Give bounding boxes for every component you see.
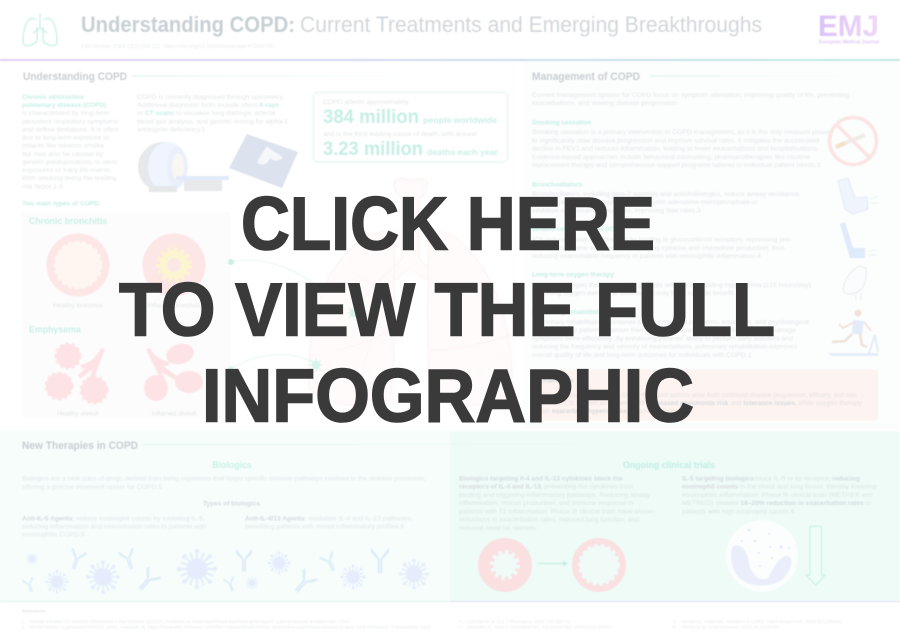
block: bronchodilators: Bronchodilators	[532, 182, 583, 188]
references: References	[22, 608, 46, 614]
text: definition: due to long-term exposure to	[22, 134, 109, 142]
callout: challenges: can exacerbate hypercapnia in some patients.	[539, 408, 680, 415]
references: Miravitlles M, Tonia T. Onorpifleol MC. Clin Chest Med. 2020;41(3):475-84.	[467, 624, 612, 630]
text: definition: persistent respiratory symptoms	[22, 118, 119, 126]
icon: chest x-ray	[229, 134, 298, 188]
header gradient bar	[0, 59, 900, 61]
text: definition: and airflow limitations. It is often	[22, 126, 119, 134]
text: IL-4 and IL-13 biologics: reduced need for steroids.	[459, 525, 538, 532]
icon: eosinophil	[726, 520, 798, 592]
block: long-term oxygen therapy	[532, 272, 813, 297]
text: IL-4 and IL-13 biologics: Biologics targeting Il-4 and IL-13 cytokines block the	[459, 476, 623, 482]
block: inhaled corticosteroids: Inhaled corticosteroids (ICS)	[532, 226, 620, 233]
icon: healthy alveoli	[46, 344, 107, 403]
icon: opened airway	[572, 538, 626, 592]
heading: ongoing clinical trials: Ongoing clinical trials	[623, 460, 715, 470]
block: pulmonary rehabilitation: Pulmonary rehabilitation combines tailored exercise programs, education, and psychological	[532, 319, 809, 326]
block: pulmonary rehabilitation: support to help patients improve their functional capacity, build confidence, and manage	[532, 327, 796, 334]
title: Understanding COPD:	[81, 12, 295, 37]
text: IL-5 biologics: eosinophilic inflammation. Phase III clinical trials (METREX and	[682, 492, 873, 499]
block: long-term oxygen therapy: Long-term oxygen therapy	[532, 272, 614, 278]
text: IL-5 biologics: METREO) showed 18–20% reduction in exacerbation rates in	[682, 500, 871, 507]
text: IL-5 biologics: IL-5 targeting biologics block IL-5 or its receptor, reducing	[682, 476, 860, 482]
references: Kersul AL, Cosío BG. Biologics in COPD. Open Respir Arch. 2024;6(2):100306.	[682, 619, 843, 624]
title	[81, 12, 762, 37]
block: pulmonary rehabilitation: symptoms more effectively. By enhancing patients' ability to perform daily activities and	[532, 336, 793, 342]
text: diagnosis: or CT scans to visualise lung damage, arterial	[137, 110, 275, 117]
text: diagnosis: antitrypsin deficiency.1	[137, 126, 205, 134]
icon: no smoking	[830, 118, 876, 164]
text: biologics definition: Biologics are a new class of drugs derived from living organisms that target specific immune pathways involved in the disease processes,	[22, 476, 426, 482]
block: smoking cessation: replacement therapy and comprehensive support programs tailored to individual patient needs.1	[532, 162, 821, 169]
logo: EMJ: EMJ	[818, 10, 879, 43]
icon: inflamed alveoli	[144, 341, 203, 401]
block: smoking cessation: Smoking cessation is a primary intervention in COPD management, as it is the only measure proven	[532, 129, 833, 136]
icon: lungs	[23, 13, 57, 46]
text: anti-IL-5: Anti-IL-5 Agents: reduce eosinophil counts by inhibiting IL-5,	[22, 516, 205, 522]
icon: inhaler	[838, 178, 879, 214]
subheading: two main types: Two main types of COPD:	[22, 200, 101, 208]
logo: EMJ: European Medical Journal	[819, 40, 880, 46]
block: inhaled corticosteroids: reducing exacerbation frequency in patients with eosinophilic inflammation.4	[532, 253, 761, 260]
references: 3.	[459, 619, 463, 624]
label: Healthy alveoli	[57, 410, 99, 418]
block: inhaled corticosteroids: ICS reduce airway inflammation by binding to glucocorticoid receptors, repressing pro-	[532, 236, 792, 244]
panel: understanding COPD	[22, 71, 508, 418]
callout: key statistics: 384 million	[323, 107, 419, 128]
sub-panel: ongoing clinical trials	[459, 460, 878, 592]
panel: disease types	[22, 212, 230, 418]
illustration: central lungs	[309, 178, 512, 406]
text: biologics definition: offering a precise treatment option for COPD.5	[22, 484, 162, 491]
text: IL-4 and IL-13 biologics: receptors of IL-4 and IL-13, preventing the cytokines from	[459, 484, 633, 490]
panel: new therapies in COPD	[0, 431, 900, 602]
block: bronchodilators: and improve airflow through increased cyclic adenosine monophosphate or	[532, 199, 758, 206]
callout: challenges: effects. ICS is often associated with increased pneumonia risk and tolerance issues, while oxygen therapy	[539, 400, 863, 407]
heading: biologics: Biologics	[212, 460, 252, 470]
text: diagnosis: Additional diagnostic tools include chest X-rays	[137, 102, 279, 109]
block: pulmonary rehabilitation: overall quality of life and long-term outcomes for individuals with COPD.1	[532, 352, 752, 359]
references: 5.	[673, 619, 677, 624]
callout: key statistics	[314, 92, 508, 162]
callout: challenges	[532, 370, 878, 420]
block: pulmonary rehabilitation: Pulmonary rehabilitation	[532, 309, 608, 316]
text: definition: genetic predispositions, in utero	[22, 159, 118, 166]
text: definition: Chronic obstructive	[22, 94, 84, 101]
icon: inflamed bronchus	[142, 234, 206, 296]
block: inhaled corticosteroids: inflammatory gene expression, decreasing cytokine and chemokine production, thus	[532, 245, 785, 252]
block: inhaled corticosteroids	[532, 226, 793, 260]
page header	[23, 10, 880, 50]
callout: key statistics: and is the third leading cause of death, with around	[323, 131, 477, 138]
text: IL-4 and IL-13 biologics: binding and triggering inflammatory pathways. Reducing airway	[459, 492, 650, 499]
heading: Understanding COPD	[23, 71, 127, 83]
callout: key statistics: 3.23 million	[323, 139, 423, 160]
heading: emphysema: Emphysema	[29, 324, 81, 334]
icon: CT scanner	[138, 142, 229, 192]
references: 2.	[22, 624, 26, 630]
heading: New Therapies in COPD	[22, 440, 138, 452]
callout: key statistics: deaths each year	[427, 147, 499, 157]
callout: key statistics: COPD affects approximately	[323, 99, 409, 106]
block: smoking cessation: Evidence-based approaches include behavioral counselling, pharmacotherapies like nicotine	[532, 154, 810, 161]
icon: healthy bronchus	[46, 234, 110, 296]
text: IL-4 and IL-13 biologics: patients with T2 inflammation. Phase III clinical trials have shown	[459, 508, 654, 516]
text: definition: exposures or early life events.	[22, 167, 112, 174]
block: bronchodilators: Bronchodilators, including beta-2 agonists and anticholinergics, reduce airway resistance	[532, 191, 799, 198]
arrow: reduction	[806, 526, 825, 585]
text: definition: pulmonary disease (COPD)	[22, 102, 106, 109]
icon: narrowed airway	[478, 538, 532, 592]
label: Inflamed alveoli	[152, 410, 196, 418]
heading: chronic bronchitis: Chronic bronchitis	[29, 216, 107, 226]
block: smoking cessation: Smoking cessation	[532, 120, 591, 126]
text: anti-IL-4/13: benefiting patients with mixed inflammatory profiles.6	[245, 524, 405, 530]
block: long-term oxygen therapy: Long-term oxygen therapy benefits patients with chronic resting hypoxaemia (≥15 hours/day)	[532, 282, 811, 289]
citation: EMJ Respir. 2024;12[1]:110-111. https://doi.org/10.33590/emjrespir/KOXN735.	[81, 44, 275, 50]
intro text: Current management options for COPD focus on symptom alleviation, improving quality of life, preventing	[532, 92, 849, 99]
references: Pitcha et al. Front Immunol. 2023;14:1123540.	[682, 624, 779, 630]
arrow	[538, 561, 568, 566]
references: Global Initiative for Chronic Obstructive Lung Disease (GOLD). Available at: https://goldcopd.org/2024-gold-report/. Last accessed: 9 September 2024.	[30, 619, 351, 624]
text: anti-IL-4/13: Anti-IL-4/13 Agents: modulate IL-4 and IL-13 pathways,	[245, 516, 413, 522]
text: definition: irritants like tobacco smoke,	[22, 142, 106, 150]
text: diagnosis: blood gas analysis, and genetic testing for alpha-1	[137, 118, 288, 126]
overlay: call to action	[119, 182, 775, 438]
references: 6.	[673, 624, 677, 630]
references: 1.	[22, 619, 26, 624]
block: smoking cessation: to significantly slow disease progression and improve survival rates. It mitigates the accelerated	[532, 137, 819, 144]
panel: management of COPD	[524, 62, 900, 430]
text: definition: With smoking being the leading	[22, 175, 117, 182]
text: IL-4 and IL-13 biologics: reductions in exacerbation rates, reduced lung function, and	[459, 516, 639, 524]
overlay: call to action: TO VIEW THE FULL	[119, 268, 775, 352]
text: anti-IL-5: reducing inflammation and exacerbation rates in patients with	[22, 524, 207, 530]
label: Healthy bronchus	[53, 302, 103, 310]
block: long-term oxygen therapy: improving oxygen delivery to tissues and may have survival benefit.	[532, 290, 735, 297]
text: definition: but may also be caused by	[22, 151, 103, 158]
callout: key statistics: people worldwide	[423, 115, 497, 125]
text: definition: is characterised by long-term	[22, 110, 110, 117]
icon: virus marker	[309, 358, 323, 372]
callout: challenges: Major challenges with current COPD treatment options arise from continued disease progression, efficacy, and side	[539, 392, 857, 399]
label: Inflamed bronchus	[148, 302, 200, 310]
connector: alveoli callout	[228, 355, 312, 372]
block: smoking cessation	[532, 120, 835, 169]
sub-panel: biologics	[22, 460, 429, 596]
references	[22, 608, 843, 630]
intro text: exacerbations, and slowing disease progression.	[532, 100, 679, 107]
icon: oxygen mask	[843, 266, 866, 300]
block: bronchodilators	[532, 182, 801, 214]
references: World Health Organization (WHO). 2024. Available at: https://www.who.int/news-room/fact-sheets/detail/chronic-obstructive-pulmonary-disease-(copd). Last Accessed: 9 September 2024.	[30, 624, 432, 630]
overlay: call to action: CLICK HERE	[241, 182, 655, 266]
illustration: viruses and antibodies	[22, 548, 429, 596]
text: diagnosis: COPD is currently diagnosed through spirometry.	[137, 94, 285, 101]
connector: airway callout	[228, 259, 322, 290]
icon: treadmill runner	[828, 310, 878, 356]
block: smoking cessation: decline in FEV1 and reduces inflammation, leading to fewer exacerbations and hospitalisations.	[532, 146, 819, 152]
text: definition: risk factor.1-3	[22, 184, 63, 190]
text: anti-IL-5: eosinophilic COPD.6	[22, 532, 85, 538]
references: Calzetta et al. Eur J Pharmacol. 2015;761:168-73.	[467, 619, 571, 624]
text: IL-4 and IL-13 biologics: inflammation, mucus production, and immune response in	[459, 500, 633, 507]
block: pulmonary rehabilitation: reducing the frequency and severity of exacerbations, pulmonary rehabilitation improves	[532, 344, 797, 351]
text: IL-5 biologics: patients with high eosinophil counts.6	[682, 508, 795, 516]
references: 4.	[459, 624, 463, 630]
icon: blue inhaler	[840, 222, 877, 258]
block: pulmonary rehabilitation	[532, 309, 811, 359]
icon: virus marker	[347, 306, 361, 320]
overlay: call to action: INFOGRAPHIC	[202, 354, 694, 438]
heading: types of biologics: Types of biologics	[203, 500, 260, 508]
text: IL-5 biologics: eosinophil counts in the blood and lung tissue, thereby lowering	[682, 484, 876, 490]
callout: challenges: Challenges	[539, 378, 574, 384]
text: biologics definition	[22, 476, 426, 491]
block: bronchodilators: inhibition of muscarinic receptors, improving flow rates.3	[532, 208, 701, 214]
heading: Management of COPD	[532, 71, 640, 83]
title: Current Treatments and Emerging Breakthroughs	[300, 12, 762, 37]
